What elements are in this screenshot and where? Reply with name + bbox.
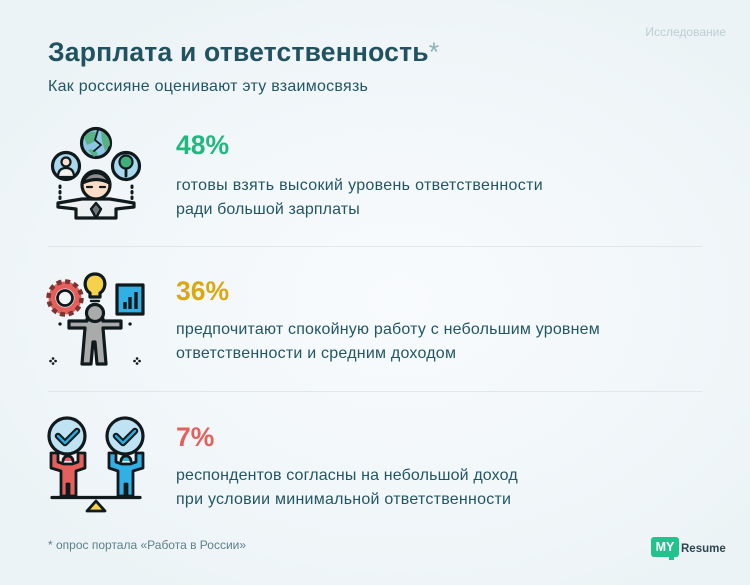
subtitle: Как россияне оценивают эту взаимосвязь — [48, 78, 368, 95]
stat: 7 percent description: при условии минимальной ответственности — [176, 491, 511, 508]
stat: 7 percent value: 7% — [176, 422, 214, 452]
stat: 36 percent description: предпочитают спокойную работу с небольшим уровнем — [176, 321, 600, 338]
icon: man juggling globe, person and tree — [52, 128, 140, 218]
stat: 48 percent description — [176, 177, 543, 218]
logo: MyResume — [651, 537, 726, 560]
stat: 36 percent description — [176, 321, 600, 362]
stat: 7 percent description: респондентов согласны на небольшой доход — [176, 467, 518, 484]
tag: category label: Исследование — [645, 25, 726, 39]
logo: MyResume: MY — [656, 540, 674, 554]
title: Зарплата и ответственность* — [48, 37, 439, 67]
icon: two people holding check marks on a balance — [49, 418, 143, 511]
footnote: * опрос портала «Работа в России» — [48, 538, 246, 552]
stat: 48 percent value: 48% — [176, 130, 229, 160]
stat: 48 percent description: ради большой зарплаты — [176, 201, 360, 218]
stat: 36 percent description: ответственности и средним доходом — [176, 345, 456, 362]
stat: 36 percent value: 36% — [176, 276, 229, 306]
logo: MyResume: Resume — [681, 543, 726, 555]
icon: person with gear, light bulb and chart — [48, 274, 143, 364]
stat: 7 percent description — [176, 467, 518, 508]
stat: 48 percent description: готовы взять высокий уровень ответственности — [176, 177, 543, 194]
